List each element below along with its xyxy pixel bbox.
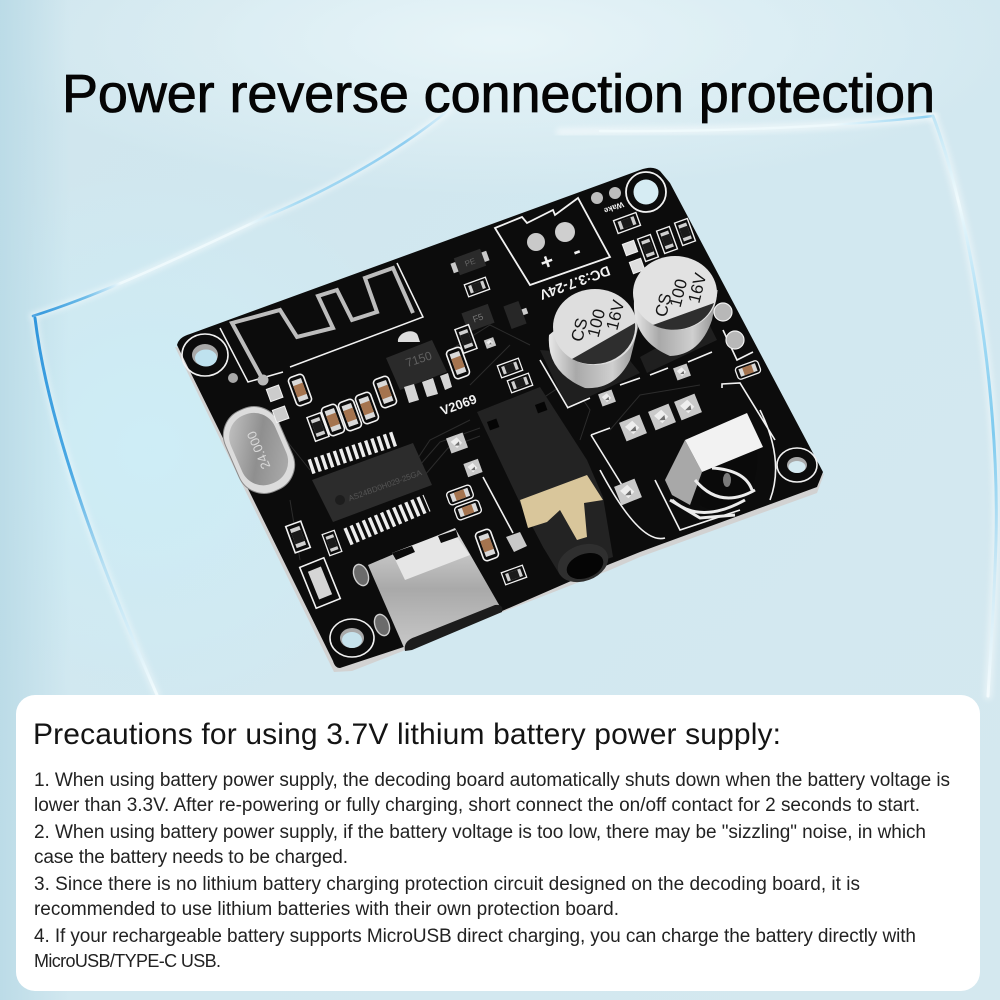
precautions list: MicroUSB/TYPE-C USB. <box>34 951 221 971</box>
transistor F5 <box>461 304 495 332</box>
panel: battery precautions <box>16 695 980 991</box>
board body <box>177 168 823 668</box>
mounting hole: top right <box>626 172 666 212</box>
crystal 24.000: 24.000 <box>244 429 273 471</box>
regulator 7150: 7150 <box>404 348 434 370</box>
USB-C connector <box>351 528 502 651</box>
precautions list <box>34 770 950 971</box>
mounting hole: bottom left <box>330 619 374 657</box>
headphone jack <box>477 387 614 589</box>
glass outline: right <box>560 116 996 696</box>
electrolytic capacitor left: 100 <box>584 307 609 339</box>
resistors <box>286 213 695 585</box>
main IC chip: AS24BD0H029-25GA <box>347 468 424 503</box>
precautions list: 1. When using battery power supply, the decoding board automatically shuts down when the battery voltage is <box>34 770 950 791</box>
mounting hole: bottom right <box>777 448 817 482</box>
wake pads <box>591 187 625 215</box>
silkscreen V2069: V2069 <box>438 391 479 418</box>
electrolytic capacitor right <box>633 256 718 356</box>
ceramic capacitors <box>287 346 761 562</box>
LED <box>300 558 340 608</box>
audio connector module <box>665 413 763 518</box>
diode PE <box>449 247 491 277</box>
transistor F5: F5 <box>471 312 485 324</box>
small square pads <box>266 240 691 477</box>
electrolytic capacitor right: 16V <box>685 271 711 305</box>
precautions list: lower than 3.3V. After re-powering or fully charging, short connect the on/off contact for 2 seconds to start. <box>34 795 920 816</box>
PCB traces <box>270 325 700 560</box>
electrolytic capacitor left <box>549 289 640 388</box>
electrolytic capacitor left: CS <box>567 316 592 344</box>
crystal 24.000 <box>215 398 303 502</box>
power terminal outline: + <box>537 248 557 275</box>
wake pads: Wake <box>602 200 625 215</box>
power terminal outline: - <box>569 238 584 264</box>
capacitor base plates <box>540 320 717 407</box>
circuit board <box>175 168 824 672</box>
power terminal outline <box>495 198 610 285</box>
through-hole pads right <box>714 303 744 349</box>
electrolytic capacitor right: 100 <box>666 277 691 309</box>
panel heading: Precautions for using 3.7V lithium battery power supply: <box>33 718 781 751</box>
precautions list: recommended to use lithium batteries with their own protection board. <box>34 899 619 920</box>
regulator 7150 <box>386 331 452 403</box>
title: Power reverse connection protection <box>62 64 935 124</box>
panel background <box>16 695 980 991</box>
precautions list: 3. Since there is no lithium battery charging protection circuit designed on the decoding board, it is <box>34 874 860 895</box>
mounting hole: top left <box>182 334 228 376</box>
jack side line <box>483 477 513 533</box>
solder pads right <box>614 394 702 505</box>
precautions list: case the battery needs to be charged. <box>34 847 348 868</box>
silkscreen voltage: DC:3.7-24V <box>537 263 612 303</box>
electrolytic capacitor left: 16V <box>603 298 629 332</box>
main IC chip <box>310 438 432 537</box>
antenna <box>220 263 423 386</box>
electrolytic capacitor right: CS <box>651 291 676 319</box>
glass outline: left <box>33 109 450 695</box>
capacitor pad outlines <box>540 330 776 539</box>
precautions list: 2. When using battery power supply, if the battery voltage is too low, there may be "sizzling" noise, in which <box>34 822 926 843</box>
precautions list: 4. If your rechargeable battery supports MicroUSB direct charging, you can charge the battery directly with <box>34 926 916 947</box>
transistor small <box>503 299 531 329</box>
diode PE: PE <box>464 256 477 269</box>
board edge <box>175 347 824 672</box>
